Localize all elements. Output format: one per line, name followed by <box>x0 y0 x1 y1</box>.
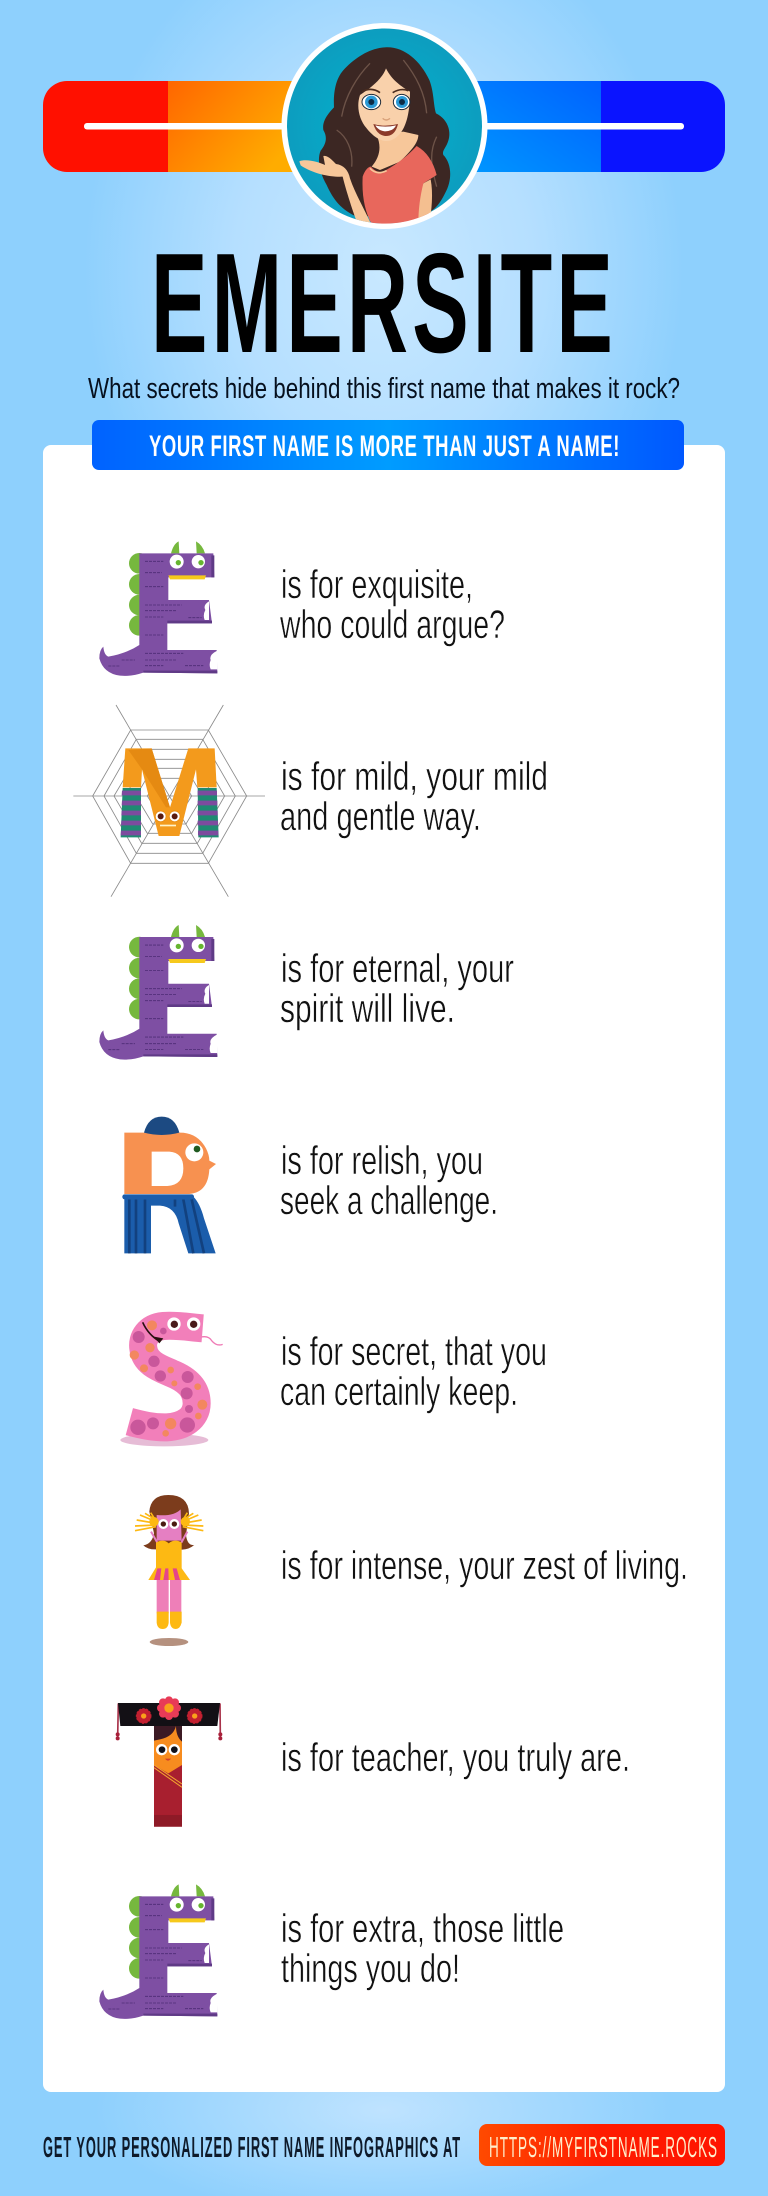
panel: letters <box>43 445 725 2092</box>
row: T teacher <box>116 1696 630 1827</box>
row: E exquisite <box>99 541 505 676</box>
white bar line <box>84 123 684 130</box>
icon: spider web M <box>73 705 265 897</box>
text: secret: can certainly keep. <box>280 1370 518 1414</box>
footer URL button <box>479 2124 725 2166</box>
arms <box>418 179 432 223</box>
hair <box>319 47 450 217</box>
row: S secret <box>120 1317 547 1446</box>
icon: monster E <box>99 541 217 676</box>
face <box>358 68 410 141</box>
text: relish <box>280 1139 498 1223</box>
text: mild: and gentle way. <box>280 795 481 839</box>
text: extra: is for extra, those little <box>281 1907 564 1951</box>
top <box>362 146 437 224</box>
text: exquisite: who could argue? <box>279 603 505 647</box>
text: extra: things you do! <box>281 1947 460 1991</box>
neck <box>372 132 418 170</box>
avatar: woman in circle <box>282 23 488 229</box>
text: eternal: is for eternal, your <box>281 947 514 991</box>
text: eternal: spirit will live. <box>280 987 455 1031</box>
text: exquisite <box>279 563 505 647</box>
text: exquisite: is for exquisite, <box>281 563 473 607</box>
text: secret: is for secret, that you <box>281 1330 547 1374</box>
text: relish: seek a challenge. <box>280 1179 498 1223</box>
text: mild: is for mild, your mild <box>281 755 548 799</box>
text: relish: is for relish, you <box>281 1139 483 1183</box>
text: secret <box>280 1330 547 1414</box>
icon: fish R <box>122 1117 216 1253</box>
header gradient bar <box>43 81 725 172</box>
icon: figure T <box>116 1696 222 1827</box>
text: teacher: is for teacher, you truly are. <box>281 1736 630 1780</box>
row: E eternal <box>99 925 514 1060</box>
icon: monster E <box>99 925 217 1060</box>
icon: monster E <box>99 1884 217 2019</box>
text: eternal <box>280 947 514 1031</box>
icon: cheerleader I <box>135 1495 203 1646</box>
row: M mild <box>73 705 548 897</box>
row: E extra <box>99 1884 564 2019</box>
text: extra <box>281 1907 564 1991</box>
row: I intense <box>135 1495 688 1646</box>
text: mild <box>280 755 548 839</box>
mouth <box>373 124 398 136</box>
eyes <box>362 94 381 110</box>
icon: snake S <box>120 1317 223 1446</box>
banner <box>92 420 684 470</box>
row: R relish <box>122 1117 498 1253</box>
